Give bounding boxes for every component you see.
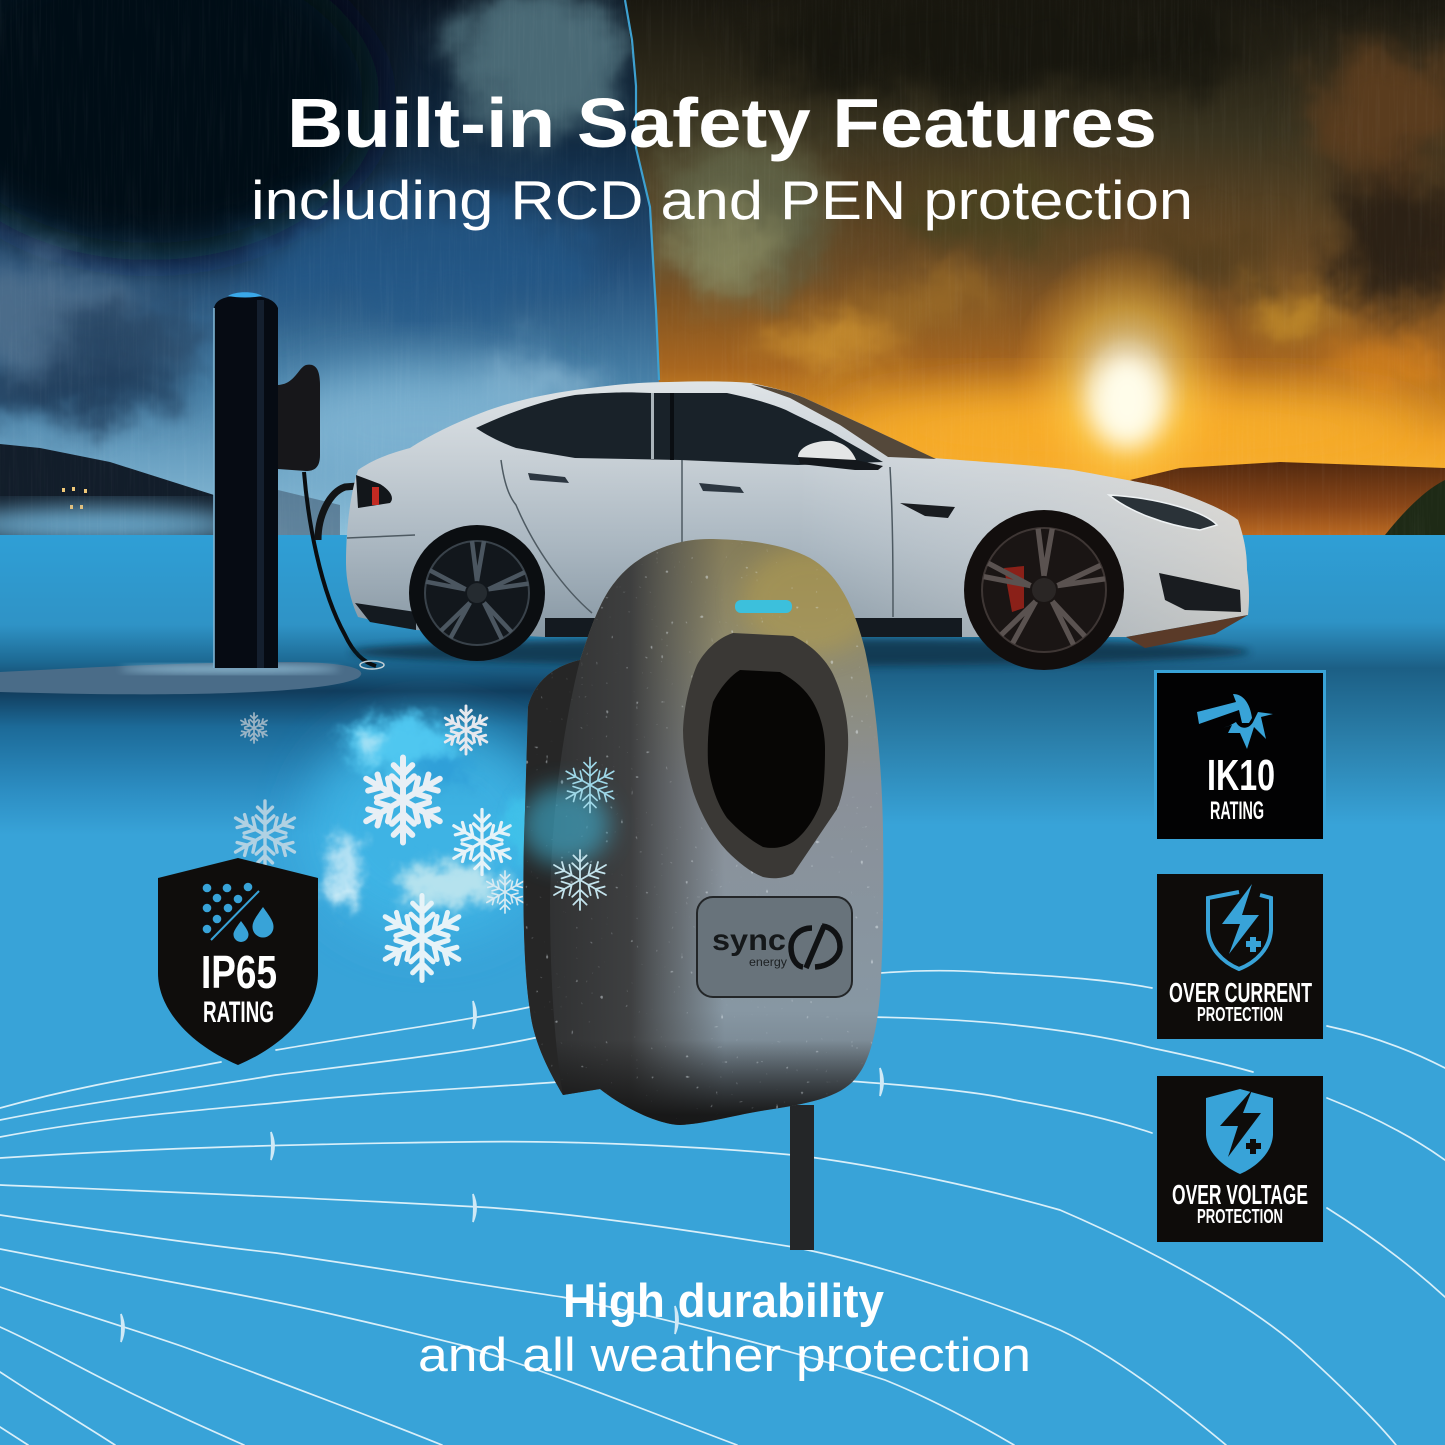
charger body [520,535,890,1130]
title: Built-in Safety Features [287,84,1157,162]
over current text: OVER CURRENT [1169,977,1312,1008]
snow burst [231,706,610,980]
bottom heading: High durability [563,1274,884,1327]
rear mount [523,660,580,1095]
IP65 text: IP65 [201,946,277,998]
car [346,381,1250,670]
charger cable [790,1105,814,1250]
logo: energy [749,955,787,969]
water reflection: right [652,535,1445,825]
badge: IP65 rating [158,858,318,1065]
over current protection label: PROTECTION [1197,1004,1283,1026]
lightning split line [625,0,659,380]
socket surround [683,633,848,878]
side vent [900,503,955,518]
post column [214,295,278,668]
underbody [355,603,962,637]
socket opening [708,670,825,848]
wall unit [278,365,320,471]
background: sunset sky [620,0,1445,540]
water reflection: left [0,535,652,835]
icon: hammer impact [1197,694,1273,749]
subtitle: including RCD and PEN protection [251,169,1193,231]
front wheel [964,510,1124,670]
IK10 rating label: RATING [1210,797,1264,825]
rain streaks [0,0,1445,536]
rear wheel [409,525,545,661]
car door lines [347,460,893,617]
flow lines [0,971,1445,1445]
flow line chevrons [121,1001,883,1342]
front grille [1159,573,1241,612]
car shadow [350,638,1250,666]
mirror [798,441,856,460]
status light [735,600,792,613]
icon: solid shield with bolt [1206,1089,1273,1174]
over voltage text: OVER VOLTAGE [1172,1179,1308,1210]
logo plate [697,897,852,997]
droplets texture [520,535,890,1130]
charger top tint [738,547,862,657]
over voltage protection label: PROTECTION [1197,1206,1283,1228]
badge: over current protection [1157,874,1323,1039]
windshield [751,384,936,459]
charging post [0,292,384,694]
logo: sync [712,924,786,957]
headlight [1109,495,1217,530]
snowflake over charger [520,758,617,910]
door handles [528,473,744,493]
icon: dust and water [203,883,274,942]
background: stormy night sky [0,0,670,543]
IK10 text: IK10 [1207,751,1275,800]
icon: outlined shield with bolt [1208,884,1271,969]
rear lamp [356,475,392,508]
sun glow [1024,252,1230,478]
ev wall charger [520,535,890,1250]
car windows [476,392,883,465]
IP65 rating label: RATING [203,996,274,1029]
post base [0,662,361,694]
post light [228,292,262,298]
charge cable [304,472,376,666]
car body [346,381,1249,637]
badge: over voltage protection [1157,1076,1323,1242]
logo [712,924,840,969]
badge: IK10 rating [1154,670,1326,842]
bottom subheading: and all weather protection [418,1328,1031,1381]
